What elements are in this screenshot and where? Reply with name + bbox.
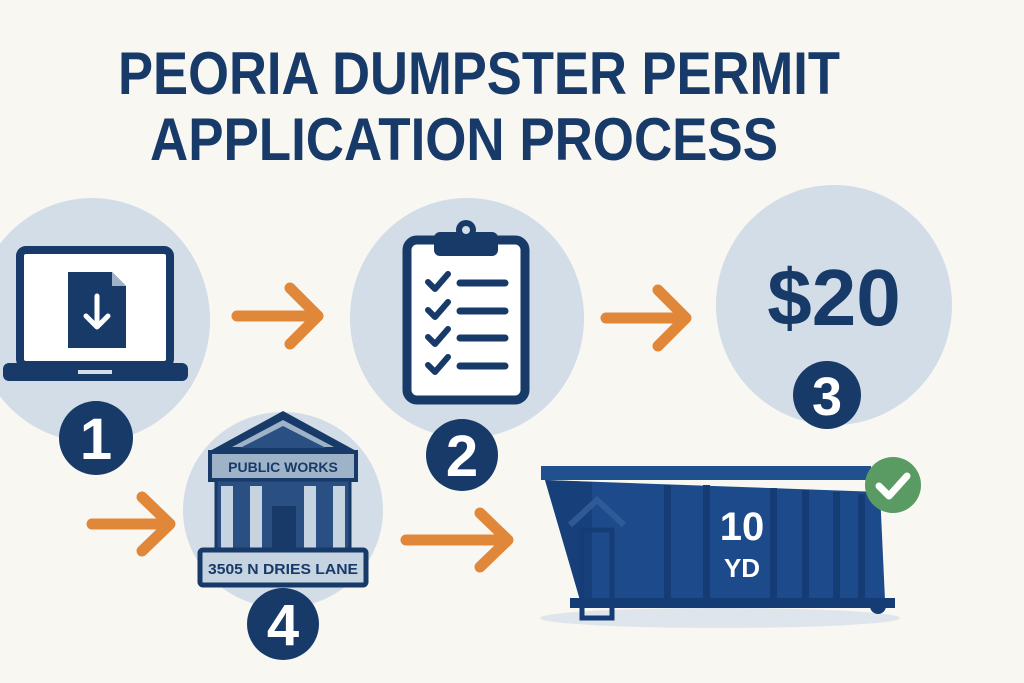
badge 2: 2	[446, 424, 478, 489]
badge 4: 4	[267, 593, 299, 658]
fee text: $20	[767, 253, 901, 342]
icon: building	[200, 411, 366, 585]
dumpster: YD	[724, 553, 760, 583]
badge 2	[426, 419, 498, 491]
icon: green check	[865, 457, 921, 513]
dumpster	[540, 466, 900, 628]
title: PEORIA DUMPSTER PERMIT	[118, 40, 840, 107]
icon: laptop	[3, 250, 188, 381]
icon: clipboard	[407, 220, 525, 400]
badge 1	[59, 401, 133, 475]
title: APPLICATION PROCESS	[150, 106, 778, 173]
dumpster: 10	[720, 505, 764, 549]
badge 3	[793, 361, 861, 429]
title	[118, 40, 840, 173]
step 3: fee	[716, 185, 952, 429]
step 1: download form	[0, 198, 210, 475]
step 2: fill out form	[350, 198, 584, 491]
badge 3: 3	[812, 367, 842, 427]
arrow 2 to 3	[606, 290, 686, 346]
badge 1: 1	[80, 407, 112, 472]
arrow 4 to dumpster	[406, 513, 508, 567]
arrow 1 to 2	[237, 288, 318, 344]
step 4: public works	[183, 411, 383, 660]
arrow to 4	[92, 497, 170, 551]
icon: building: 3505 N DRIES LANE	[208, 561, 358, 578]
icon: building: PUBLIC WORKS	[228, 459, 338, 475]
badge 4	[247, 588, 319, 660]
